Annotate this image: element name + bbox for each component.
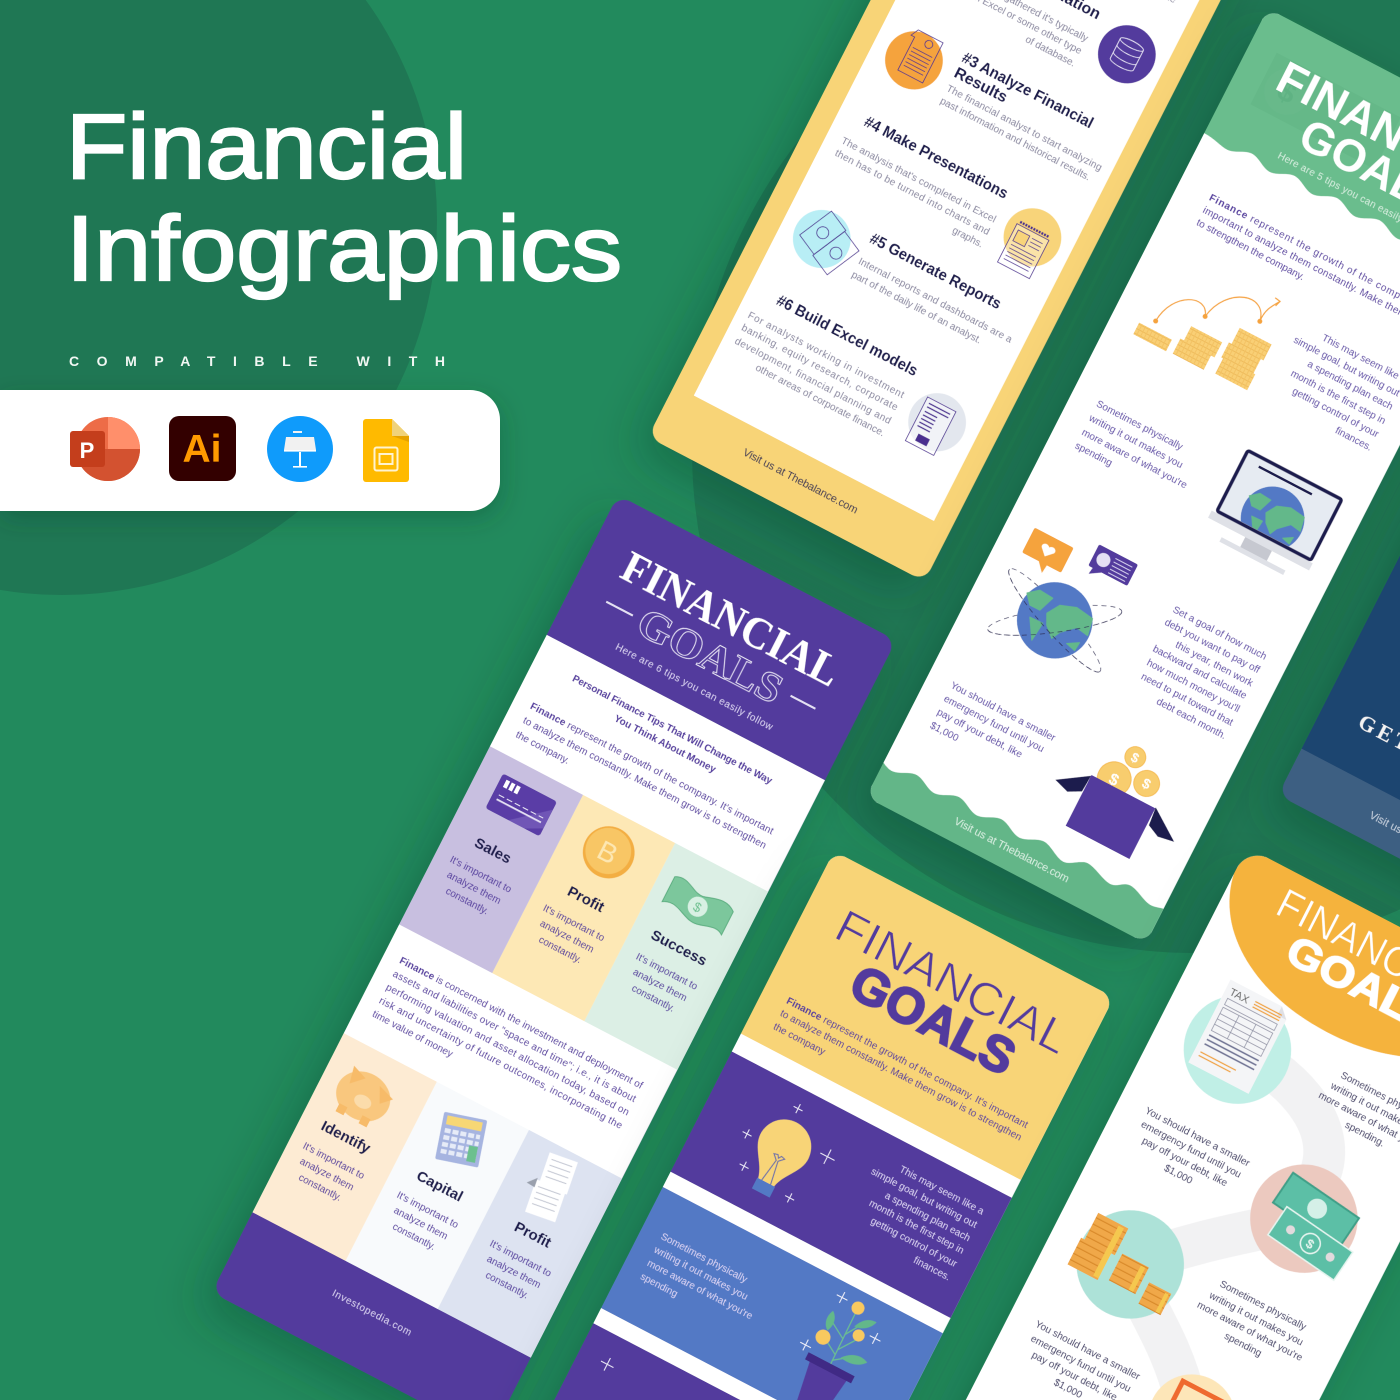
text: left 2: $1,000 <box>928 720 961 745</box>
icon: calculator <box>435 1112 487 1168</box>
text: block 3: more aware of what you're <box>1195 1300 1304 1364</box>
text: second paragraph <box>370 955 645 1145</box>
label: Capital <box>414 1167 466 1206</box>
panel: capital <box>346 1082 529 1309</box>
icon: open box with coins <box>1039 720 1205 874</box>
text: constantly. <box>537 935 583 966</box>
text: right 2: need to put toward that <box>1139 672 1235 729</box>
text: intro: to analyze them constantly. Make them grow is to strengthen <box>521 715 768 852</box>
text: analyze them <box>392 1205 449 1243</box>
text: block 3: spending <box>1222 1331 1263 1360</box>
text: step 3: The financial analyst to start analyzing <box>944 83 1104 174</box>
title: Infographics <box>66 198 622 300</box>
icon: database <box>1088 15 1166 94</box>
text: second paragraph: performing valuation and asset allocation today, based on <box>384 982 631 1118</box>
text: constantly. <box>390 1221 437 1253</box>
icon: papers <box>518 1148 578 1223</box>
icon: PowerPoint: P <box>80 438 94 463</box>
text: left 2: emergency fund until you <box>942 694 1046 755</box>
label: Sales <box>472 834 514 868</box>
subtitle: compatible with: COMPATIBLE WITH <box>69 353 445 369</box>
text: step 6: For analysts working in investment <box>746 310 906 401</box>
text: analyze them <box>631 967 689 1004</box>
text: analyze them <box>538 918 596 956</box>
footer text: Visit us at Thebalance.com <box>741 447 860 517</box>
footer band <box>1278 749 1400 941</box>
card: yellow purple blue goals <box>471 851 1114 1400</box>
label: Success <box>648 927 710 970</box>
watermark banknote: $ <box>1272 74 1302 111</box>
icon: PowerPoint <box>70 417 140 481</box>
text: step 5: Internal reports and dashboards are a <box>856 256 1014 346</box>
icon: piggy bank <box>327 1062 399 1132</box>
text: heading: Personal Finance Tips That Will Change the Way <box>570 674 774 787</box>
icon: credit card <box>485 773 557 836</box>
footer text: Investopedia.com <box>330 1288 413 1339</box>
intro text: to strengthen the company. <box>1194 218 1306 283</box>
text: right 2: Set a goal of how much <box>1171 605 1268 663</box>
text: block 4: emergency fund until you <box>1029 1334 1132 1395</box>
icon: sparkle <box>598 1355 617 1374</box>
background circle: top left <box>0 0 437 595</box>
text: right 1: finances. <box>1333 425 1374 454</box>
card: navy partial <box>1278 439 1400 941</box>
text: purple panel: This may seem like a <box>897 1164 986 1218</box>
text: purple panel: a spending plan each <box>883 1190 972 1244</box>
text: analyze them <box>445 870 502 907</box>
icon: Keynote <box>267 416 333 482</box>
text <box>287 1141 366 1209</box>
text: block 2: $1,000 <box>1162 1163 1195 1187</box>
text: left 1 <box>1072 398 1204 505</box>
heading: step 3: Results <box>951 65 1010 107</box>
text: block 2: emergency fund until you <box>1139 1119 1243 1181</box>
text: step 6 <box>726 310 906 440</box>
text: intro: Finance represent the growth of the company. It's important <box>528 701 775 837</box>
footer text: Visit us at Thebalance.com <box>952 816 1071 885</box>
text: constantly. <box>630 983 676 1015</box>
icon: banknotes: $ <box>1303 1236 1318 1253</box>
panel: blue growth <box>601 1187 943 1400</box>
icon: newspaper report <box>989 198 1071 285</box>
text: right 1: simple goal, but writing out <box>1291 335 1400 399</box>
title: GOALS <box>841 954 1025 1086</box>
text: step 4: then has to be turned into charts and <box>833 148 991 238</box>
icon: globe with orbits <box>973 545 1137 695</box>
label: Identify <box>318 1117 374 1158</box>
orange dome header <box>1229 856 1400 1056</box>
card: green financial goals <box>854 2 1400 945</box>
title <box>66 96 622 300</box>
panel: success <box>584 843 768 1070</box>
intro text: to analyze them constantly. Make them grow is to strengthen <box>778 1008 1023 1144</box>
text: analyze them <box>298 1156 355 1193</box>
text: It's important to <box>541 903 606 944</box>
label: Profit <box>511 1218 554 1252</box>
text: second paragraph: assets and liabilities over "space and time"; i.e., it is about <box>391 969 638 1105</box>
text <box>474 1238 553 1307</box>
text: blue panel <box>637 1231 768 1336</box>
panel: identify <box>253 1033 437 1261</box>
icon: open box with coins: $ <box>1140 775 1154 792</box>
title <box>807 899 1078 1104</box>
text: step 6: other areas of corporate finance. <box>753 363 886 439</box>
text: block 2: pay off your debt, like <box>1140 1136 1229 1190</box>
text: step 3: past information and historical results. <box>938 96 1092 183</box>
icon: tax form: TAX <box>1227 986 1252 1007</box>
icon: invoice <box>897 383 976 463</box>
icon: bitcoin coin: B <box>592 834 623 870</box>
text: right 2: this year, then work <box>1173 640 1255 689</box>
text: right 2: how much money you'll <box>1145 658 1241 715</box>
text: left 2: You should have a smaller <box>949 680 1058 744</box>
white body section <box>253 635 825 1358</box>
text: block 1 <box>1310 1065 1400 1167</box>
text <box>381 1190 460 1258</box>
text: analyze them <box>485 1254 542 1291</box>
text: left 1: more aware of what you're <box>1080 427 1189 492</box>
text <box>434 854 513 923</box>
text: step 2: of database. <box>1023 34 1077 70</box>
icon: coin stacks <box>1056 1190 1203 1338</box>
icon: open box with coins: $ <box>1106 771 1121 790</box>
header wave <box>1204 13 1400 240</box>
text: blue panel: writing it out makes you <box>651 1244 749 1303</box>
icon: banknote <box>660 875 736 937</box>
text: right 1: a spending plan each <box>1305 359 1394 413</box>
icon: Google Slides <box>363 419 409 482</box>
text: block 1: spending. <box>1343 1120 1386 1150</box>
text: purple panel <box>842 1153 986 1284</box>
text: step 5: part of the daily life of an analyst. <box>849 270 983 347</box>
card: yellow financial analysis steps <box>648 0 1288 581</box>
icon: Illustrator: Ai <box>182 428 222 471</box>
text: right 1 <box>1264 321 1400 454</box>
title: FINANCIAL <box>827 899 1078 1064</box>
text: second paragraph: Finance is concerned with the investment and deployment of <box>397 955 645 1092</box>
title: FINANCIAL <box>614 542 848 696</box>
icon: speech bubbles <box>1018 514 1138 611</box>
heading: step 6: #6 Build Excel models <box>773 292 920 380</box>
text: It's important to <box>488 1238 553 1280</box>
icon: orange frame <box>1133 1359 1251 1400</box>
text: right 2: debt you want to pay off <box>1163 617 1262 676</box>
panel: purple idea <box>671 1051 1012 1318</box>
icon: monitor with globe <box>1208 449 1344 575</box>
text: right 1: getting control of your <box>1290 386 1381 441</box>
header panel <box>741 851 1114 1180</box>
text: purple panel: finances. <box>911 1255 952 1283</box>
text: It's important to <box>395 1190 460 1231</box>
icon: banknote: $ <box>691 899 705 916</box>
text: step 6: development, financial planning and <box>733 336 893 427</box>
text <box>527 903 606 971</box>
title: GOALS <box>629 600 790 714</box>
panel: sales <box>399 746 583 973</box>
icon: banknotes <box>783 200 869 283</box>
watermark banknote <box>1278 82 1296 102</box>
text: It's important to <box>634 952 700 993</box>
text: second paragraph: risk and uncertainty of future outcomes, incorporating the <box>377 996 624 1132</box>
text: right 1: month is the first step in <box>1289 368 1387 427</box>
text: purple panel: simple goal, but writing out <box>869 1166 979 1231</box>
text: block 4 <box>1014 1319 1142 1400</box>
intro text: the company <box>771 1022 827 1058</box>
text: constantly. <box>483 1270 530 1302</box>
label: Profit <box>565 883 607 916</box>
text: step 4: The analysis that's completed in Excel <box>839 136 997 226</box>
text: block 4: You should have a smaller <box>1033 1319 1142 1383</box>
footer wave <box>870 762 1164 938</box>
text: blue panel: more aware of what you're <box>645 1258 754 1322</box>
icon: banknotes <box>1232 1146 1380 1294</box>
heading: step 5: #5 Generate Reports <box>867 230 1004 313</box>
text: block 3 <box>1188 1274 1318 1378</box>
chart: coin stacks with arcs <box>1133 247 1291 393</box>
heading: step 4: #4 Make Presentations <box>861 114 1011 203</box>
text: block 3: writing it out makes you <box>1206 1290 1305 1348</box>
text: constantly. <box>444 886 490 918</box>
icon: open box with coins: $ <box>1128 749 1142 766</box>
icon: bitcoin coin <box>574 817 644 888</box>
text: heading: You Think About Money <box>612 713 718 776</box>
subtitle: Here are 6 tips you can easily follow <box>613 642 775 734</box>
text: right 2 <box>1129 604 1269 742</box>
icon: tax form <box>1165 972 1312 1123</box>
title: Financial <box>66 96 467 198</box>
icon: Illustrator <box>169 416 236 481</box>
text: left 1: Sometimes physically <box>1094 399 1184 453</box>
text: intro: the company. <box>514 730 571 767</box>
card: white with orange dome <box>946 855 1400 1400</box>
text: block 3: Sometimes physically <box>1218 1279 1308 1333</box>
text: step 6: banking, equity research, corporate <box>739 323 900 414</box>
text: block 2: You should have a smaller <box>1143 1106 1252 1170</box>
text: right 2: backward and calculate <box>1151 644 1249 702</box>
text: It's important to <box>301 1141 366 1182</box>
heading: step 3: #3 Analyze Financial <box>959 50 1096 132</box>
road path <box>1130 1058 1345 1388</box>
text: constantly. <box>296 1172 343 1204</box>
text: left 1: spending <box>1073 441 1114 469</box>
intro text: Finance represent the growth of the company. It's important <box>784 996 1030 1131</box>
panel: profit <box>492 795 675 1021</box>
card: purple financial goals <box>212 495 896 1400</box>
background circle: behind cards <box>692 0 1400 953</box>
text: It's important to <box>448 854 513 896</box>
text: blue panel: spending <box>638 1271 679 1300</box>
text: step 4: graphs. <box>950 225 985 250</box>
panel: profit 2 <box>438 1130 622 1358</box>
icon: light bulb <box>722 1086 850 1217</box>
text: second paragraph: time value of money <box>370 1009 454 1060</box>
icon: plant with coins <box>772 1284 893 1400</box>
text: block 2 <box>1124 1106 1252 1207</box>
text: right 2: debt each month. <box>1154 696 1228 742</box>
text <box>620 952 700 1020</box>
text: left 1: writing it out makes you <box>1086 413 1184 471</box>
text: left 2 <box>928 680 1058 785</box>
panel: software bar <box>0 390 500 511</box>
text: blue panel: Sometimes physically <box>659 1231 749 1286</box>
icon: document on orange circle <box>875 21 953 100</box>
panel: purple lower <box>503 1323 873 1400</box>
text: purple panel: getting control of your <box>869 1216 959 1270</box>
text: purple panel: month is the first step in <box>867 1198 965 1257</box>
text: left 2: pay off your debt, like <box>935 707 1024 761</box>
